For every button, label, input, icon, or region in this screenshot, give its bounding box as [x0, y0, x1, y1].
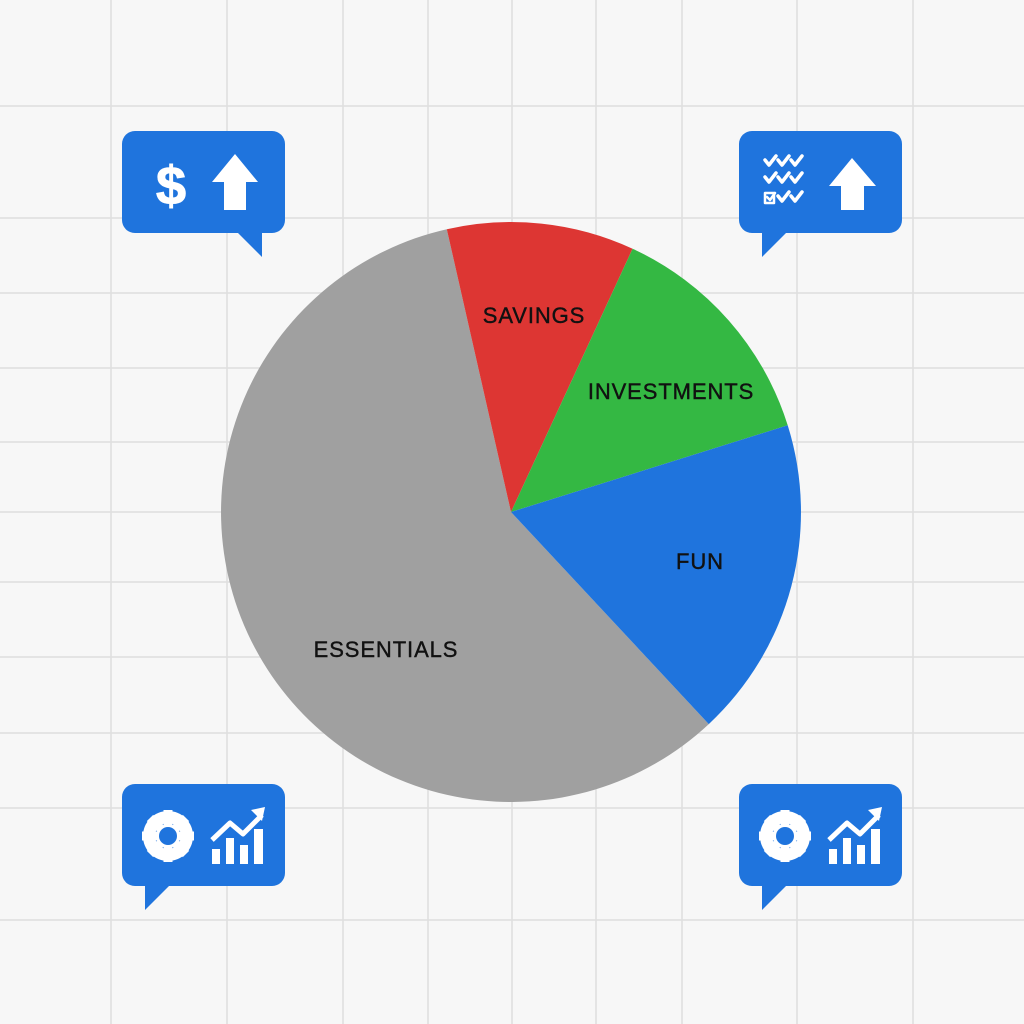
label: savings: SAVINGS	[483, 303, 585, 328]
icon: dollar up callout	[122, 131, 285, 257]
label: investments: INVESTMENTS	[588, 379, 754, 404]
icon: dollar up callout: $	[156, 156, 186, 216]
icon: checklist up callout	[739, 131, 902, 257]
icon: gear chart callout bottom-left	[122, 784, 285, 910]
label: essentials: ESSENTIALS	[314, 637, 458, 662]
label: fun: FUN	[676, 549, 724, 574]
icon: gear chart callout bottom-right	[739, 784, 902, 910]
pie chart	[221, 222, 801, 802]
slice: essentials	[221, 229, 709, 802]
slice: savings	[447, 222, 633, 512]
slice: fun	[511, 425, 801, 724]
slice: investments	[511, 249, 788, 512]
